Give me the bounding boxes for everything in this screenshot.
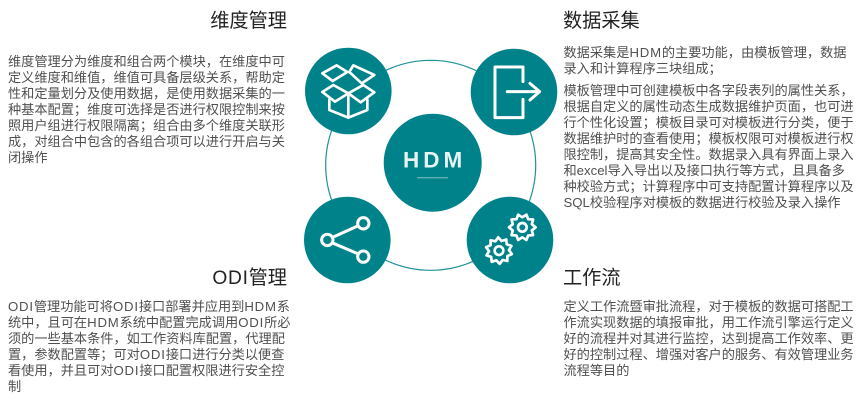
text block: 数据采集 detail: 模板管理中可创建模板中各字段表列的属性关系， — [564, 82, 854, 98]
text block: 维度管理 description: 维度管理分为维度和组合两个模块，在维度中可 — [8, 54, 285, 69]
text block: 数据采集 detail: 行个性化设置；模板目录可对模板进行分类，便于 — [564, 114, 854, 130]
icon: open box — [305, 48, 392, 134]
text block: 数据采集 detail: 和excel导入导出以及接口执行等方式，且具备多 — [564, 162, 845, 178]
text block: 数据采集 intro: 数据采集是HDM的主要功能，由模板管理，数据 — [564, 45, 846, 60]
text block: 维度管理 description: 种基本配置；维度可选择是否进行权限控制来按 — [8, 102, 285, 117]
heading: 工作流: 工作流 — [563, 268, 621, 288]
icon: share nodes — [304, 197, 391, 283]
text block: 维度管理 description: 定义维度和维值，维值可具备层级关系，帮助定 — [8, 70, 285, 85]
text block: 维度管理 description: 闭操作 — [8, 150, 48, 165]
text block: 数据采集 intro — [564, 45, 846, 76]
text block: 工作流 description: 流程等目的 — [564, 363, 629, 378]
icon: gears — [467, 197, 553, 283]
text block: ODI管理 description: 制 — [8, 379, 21, 394]
text block: ODI管理 description: ODI管理功能可将ODI接口部署并应用到HDM系 — [8, 299, 290, 314]
text block: 维度管理 description: 照用户组进行权限隔离；组合由多个维度关联形 — [8, 118, 285, 133]
text block: 工作流 description — [564, 299, 854, 378]
text block: 工作流 description: 作流实现数据的填报审批，用工作流引擎运行定义 — [564, 315, 854, 330]
heading: 数据采集: 数据采集 — [563, 11, 640, 32]
text block: ODI管理 description: 须的一些基本条件，如工作资料库配置，代理配 — [8, 331, 285, 346]
text block: 工作流 description: 好的流程并对其进行监控，达到提高工作效率、更 — [564, 331, 854, 346]
text block: 维度管理 description: 成，对组合中包含的各组合项可以进行开启与关 — [8, 134, 285, 149]
text block: ODI管理 description — [8, 299, 290, 394]
text block: 数据采集 detail — [564, 82, 854, 210]
text block: 数据采集 detail: SQL校验程序对模板的数据进行校验及录入操作 — [564, 194, 840, 210]
text block: 维度管理 description: 性和定量划分及使用数据，是使用数据采集的一 — [8, 86, 285, 101]
text block: ODI管理 description: 统中，且可在HDM系统中配置完成调用ODI所必 — [8, 315, 290, 330]
text block: 数据采集 detail: 数据维护时的查看使用；模板权限可对模板进行权 — [564, 130, 854, 146]
text block: 数据采集 detail: 根据自定义的属性动态生成数据维护页面，也可进 — [564, 98, 854, 114]
heading: 维度管理: 维度管理 — [210, 11, 287, 32]
text block: 数据采集 detail: 种校验方式；计算程序中可支持配置计算程序以及 — [564, 178, 854, 194]
text block: ODI管理 description: 看使用，并且可对ODI接口配置权限进行安全控 — [8, 363, 284, 378]
text block: 数据采集 intro: 录入和计算程序三块组成； — [564, 61, 722, 76]
heading: ODI管理: ODI管理 — [212, 268, 287, 289]
text block: 维度管理 description — [8, 54, 285, 165]
text block: ODI管理 description: 置，参数配置等；可对ODI接口进行分类以便查 — [8, 347, 284, 362]
text block: 数据采集 detail: 限控制，提高其安全性。数据录入具有界面上录入 — [564, 146, 854, 162]
centre circle: HDM — [384, 114, 482, 212]
centre circle: HDM: HDM — [403, 147, 466, 172]
icon: exit door with arrow — [471, 49, 557, 135]
outer ring — [326, 60, 536, 270]
text block: 工作流 description: 定义工作流暨审批流程，对于模板的数据可搭配工 — [564, 299, 854, 314]
text block: 工作流 description: 好的控制过程、增强对客户的服务、有效管理业务 — [564, 347, 854, 362]
